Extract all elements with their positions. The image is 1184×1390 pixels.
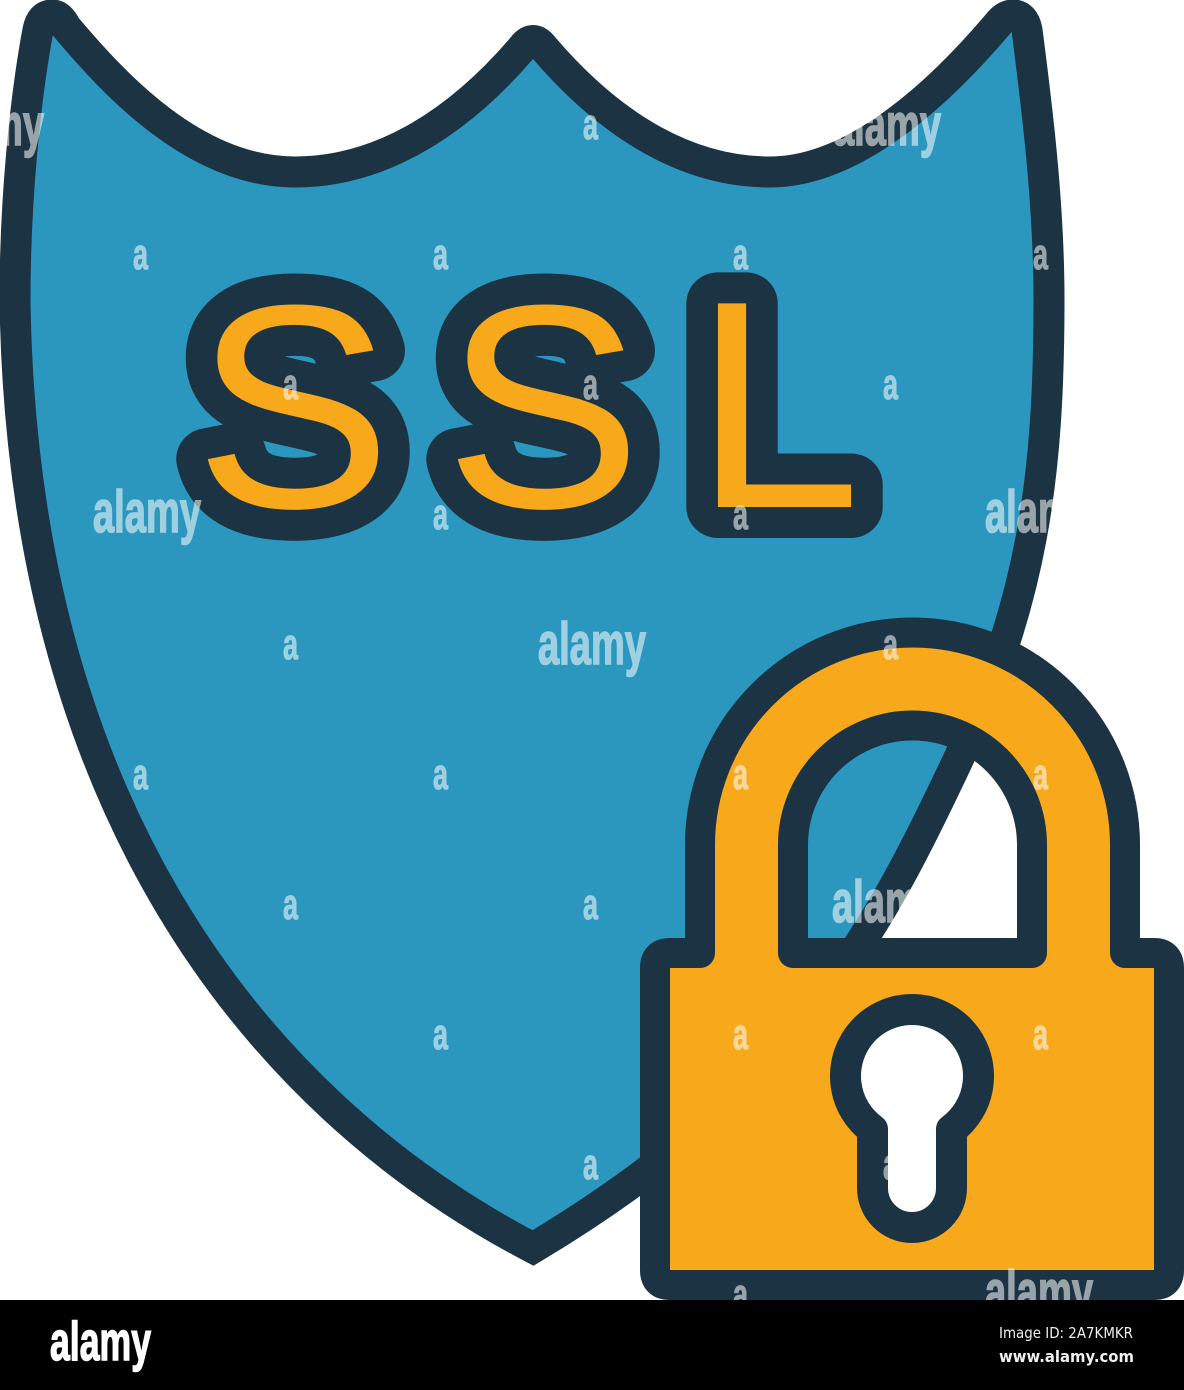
heading: SSL lettering: SSL xyxy=(194,240,861,570)
watermark: repeated alamy marks: a xyxy=(283,880,298,929)
watermark: repeated alamy marks: alamy xyxy=(93,479,201,545)
watermark: repeated alamy marks: alamy xyxy=(985,1259,1093,1325)
watermark: repeated alamy marks: alamy xyxy=(832,869,940,935)
watermark: repeated alamy marks: a xyxy=(433,750,448,799)
padlock keyhole xyxy=(846,1010,979,1228)
watermark: repeated alamy marks: a xyxy=(1033,230,1048,279)
watermark: repeated alamy marks: a xyxy=(133,750,148,799)
watermark: repeated alamy marks: a xyxy=(733,490,748,539)
watermark: repeated alamy marks: a xyxy=(433,1010,448,1059)
watermark: repeated alamy marks: a xyxy=(433,230,448,279)
icon: shield xyxy=(15,15,1049,1248)
footer logo: alamy: alamy xyxy=(50,1310,151,1372)
watermark: repeated alamy marks: a xyxy=(733,750,748,799)
watermark: repeated alamy marks: a xyxy=(733,230,748,279)
footer text: image id: Image ID: 2A7KMKR xyxy=(999,1324,1133,1342)
watermark: repeated alamy marks: a xyxy=(1033,1010,1048,1059)
watermark: repeated alamy marks: a xyxy=(1033,750,1048,799)
watermark: repeated alamy marks: a xyxy=(133,230,148,279)
watermark: repeated alamy marks: a xyxy=(283,1140,298,1189)
padlock body and shackle xyxy=(655,632,1169,1285)
watermark: repeated alamy marks: a xyxy=(583,360,598,409)
footer text: website: www.alamy.com xyxy=(999,1347,1134,1366)
icon: padlock xyxy=(655,632,1169,1285)
footer bar xyxy=(0,1300,1184,1390)
watermark: repeated alamy marks: a xyxy=(433,490,448,539)
watermark: repeated alamy marks: a xyxy=(583,880,598,929)
watermark: repeated alamy marks: alamy xyxy=(985,479,1093,545)
watermark: repeated alamy marks: a xyxy=(283,620,298,669)
watermark: repeated alamy marks: a xyxy=(733,1270,748,1319)
watermark: repeated alamy marks: a xyxy=(283,360,298,409)
watermark: repeated alamy marks: a xyxy=(583,1140,598,1189)
watermark: repeated alamy marks: a xyxy=(583,100,598,149)
watermark: repeated alamy marks: a xyxy=(883,1140,898,1189)
watermark: repeated alamy marks: alamy xyxy=(538,611,646,677)
watermark: repeated alamy marks: a xyxy=(883,620,898,669)
watermark: repeated alamy marks: a xyxy=(883,360,898,409)
watermark: repeated alamy marks: alamy xyxy=(833,92,941,158)
watermark: repeated alamy marks: a xyxy=(733,1010,748,1059)
